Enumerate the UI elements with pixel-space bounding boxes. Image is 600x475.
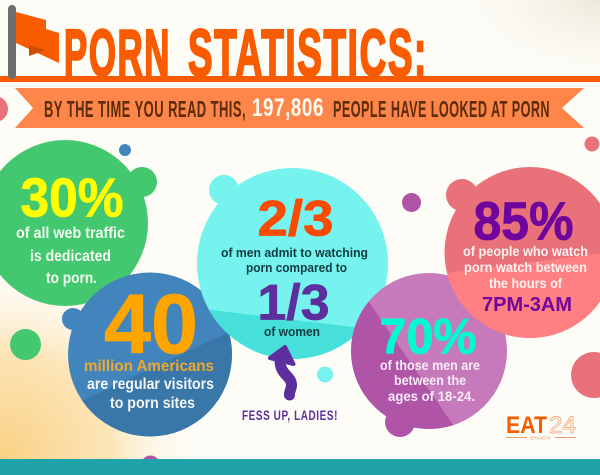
icon: flag bbox=[8, 5, 59, 79]
text: age range: between the bbox=[394, 373, 466, 388]
text: age range bbox=[380, 358, 480, 404]
text: web traffic: of all web traffic bbox=[16, 225, 125, 242]
panel: 30 percent bbox=[0, 140, 157, 306]
text: web traffic bbox=[16, 225, 125, 287]
decorative dot: green bbox=[10, 329, 41, 360]
text: regular visitors: are regular visitors bbox=[87, 376, 214, 393]
banner bbox=[15, 88, 584, 128]
panel: 70 percent bbox=[340, 270, 507, 440]
text: people who watch: porn watch between bbox=[464, 259, 587, 275]
decorative dot: red top right bbox=[584, 136, 600, 152]
text: people who watch: the hours of bbox=[489, 275, 562, 291]
text: people who watch: of people who watch bbox=[463, 243, 588, 259]
logo: EAT24: EAT bbox=[506, 412, 547, 439]
icon: squiggly arrow bbox=[270, 347, 294, 395]
logo: EAT24: ENJOY bbox=[530, 436, 551, 440]
text: web traffic: is dedicated bbox=[30, 248, 111, 265]
decorative dot: pink left bbox=[0, 96, 8, 122]
text: age range: of those men are bbox=[380, 358, 480, 373]
footer bar bbox=[0, 459, 600, 475]
stat: 70%: 70% bbox=[380, 308, 476, 364]
logo: EAT24 bbox=[506, 412, 576, 440]
banner text: counter: 197,806 bbox=[252, 94, 324, 122]
text: of women: of women bbox=[264, 324, 320, 339]
decorative dot: purple bottom bbox=[141, 456, 160, 474]
stat: 30%: 30% bbox=[20, 166, 124, 228]
text: men admit: of men admit to watching bbox=[221, 245, 368, 260]
text: people who watch bbox=[463, 243, 588, 291]
text: regular visitors bbox=[87, 376, 214, 412]
decorative dot: blue bbox=[119, 144, 131, 156]
logo: EAT24: 24 bbox=[549, 412, 576, 439]
stat: 40: 40 bbox=[104, 277, 198, 371]
stat: 1/3: 1/3 bbox=[258, 274, 330, 330]
decorative dot: cyan bbox=[317, 366, 333, 382]
decorative dot: purple bbox=[402, 193, 421, 212]
caption: fess up: FESS UP, LADIES! bbox=[242, 408, 338, 423]
stat: 2/3: 2/3 bbox=[258, 190, 334, 246]
panel: 85 percent bbox=[440, 167, 600, 345]
title rule bbox=[0, 76, 600, 82]
decorative dot: red right bbox=[571, 352, 600, 398]
text: men admit bbox=[221, 245, 368, 275]
title bbox=[64, 16, 428, 90]
panel: 40 million bbox=[62, 272, 232, 436]
text: million Americans: million Americans bbox=[84, 358, 214, 375]
text: men admit: porn compared to bbox=[246, 260, 347, 275]
title: PORN bbox=[64, 16, 171, 90]
text: time range: 7PM-3AM bbox=[482, 294, 572, 316]
text: regular visitors: to porn sites bbox=[110, 395, 195, 412]
stat: 85%: 85% bbox=[474, 192, 574, 252]
text: web traffic: to porn. bbox=[46, 270, 97, 287]
text: age range: ages of 18-24. bbox=[388, 389, 475, 404]
banner text: lead: BY THE TIME YOU READ THIS, bbox=[44, 96, 246, 122]
panel: 2/3 men and 1/3 women bbox=[195, 168, 395, 365]
